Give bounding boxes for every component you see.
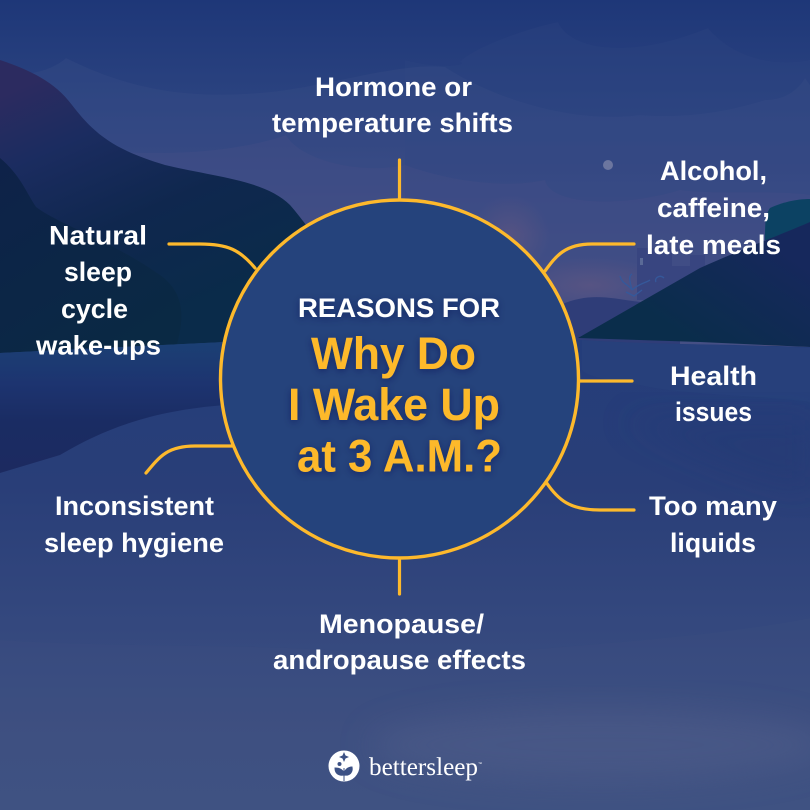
title: why do I wake up at 3 A.M. — [288, 328, 502, 482]
logo: bettersleep: bettersleep — [369, 754, 478, 781]
label: hormone or temperature shifts — [272, 72, 513, 138]
label: too many liquids: Too many — [649, 491, 777, 521]
icon: logo mark — [328, 750, 360, 782]
label: menopause/andropause effects — [273, 609, 526, 675]
water — [0, 340, 810, 810]
clouds — [0, 22, 810, 345]
logo: bettersleep: ™ — [478, 761, 482, 766]
title: why do I wake up at 3 A.M.: I Wake Up — [288, 379, 500, 430]
title: why do I wake up at 3 A.M.: Why Do — [311, 328, 476, 379]
label: hormone or temperature shifts: temperature shifts — [272, 108, 513, 138]
sun glow — [470, 195, 550, 275]
label: natural sleep cycle wake-ups — [35, 220, 161, 360]
label: menopause/andropause effects: andropause effects — [273, 645, 526, 675]
label: inconsistent sleep hygiene — [44, 491, 224, 558]
title: reasons for: REASONS FOR — [298, 293, 500, 323]
label: health issues: Health — [670, 361, 757, 391]
connector lines — [146, 160, 634, 594]
label: alcohol, caffeine, late meals — [646, 156, 781, 260]
label: alcohol, caffeine, late meals: late meals — [646, 230, 781, 260]
label: natural sleep cycle wake-ups: wake-ups — [35, 330, 161, 360]
label: natural sleep cycle wake-ups: Natural — [49, 220, 147, 250]
tree — [620, 274, 664, 296]
title: why do I wake up at 3 A.M.: at 3 A.M.? — [297, 430, 502, 482]
label: natural sleep cycle wake-ups: sleep — [64, 257, 132, 287]
logo: bettersleep — [328, 750, 482, 782]
label: hormone or temperature shifts: Hormone or — [315, 72, 472, 102]
label: alcohol, caffeine, late meals: caffeine, — [657, 193, 770, 223]
label: menopause/andropause effects: Menopause/ — [319, 609, 485, 639]
label: inconsistent sleep hygiene: sleep hygiene — [44, 528, 224, 558]
label: health issues — [670, 361, 757, 427]
castle — [637, 248, 705, 300]
label: alcohol, caffeine, late meals: Alcohol, — [660, 156, 767, 186]
label: too many liquids: liquids — [670, 528, 756, 558]
icon: moon — [603, 160, 613, 170]
left mountain — [0, 60, 340, 365]
label: too many liquids — [649, 491, 777, 558]
label: health issues: issues — [675, 397, 752, 427]
label: natural sleep cycle wake-ups: cycle — [61, 294, 128, 324]
label: inconsistent sleep hygiene: Inconsistent — [55, 491, 214, 521]
distant hills — [560, 297, 680, 345]
central circle — [220, 200, 578, 558]
right hill — [765, 199, 810, 240]
